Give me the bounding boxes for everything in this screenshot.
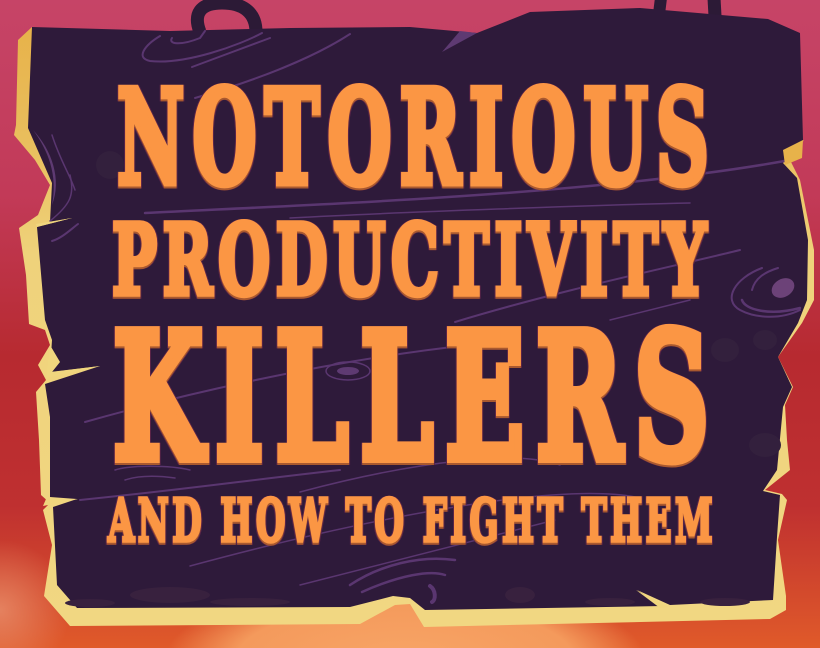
icon: right hanging chain loop	[659, 0, 715, 16]
cream splinter details	[36, 140, 803, 608]
title	[107, 61, 721, 555]
purple wedge details	[33, 31, 477, 205]
knots and blotches	[65, 151, 798, 607]
icon: left hanging chain loop	[197, 3, 256, 32]
